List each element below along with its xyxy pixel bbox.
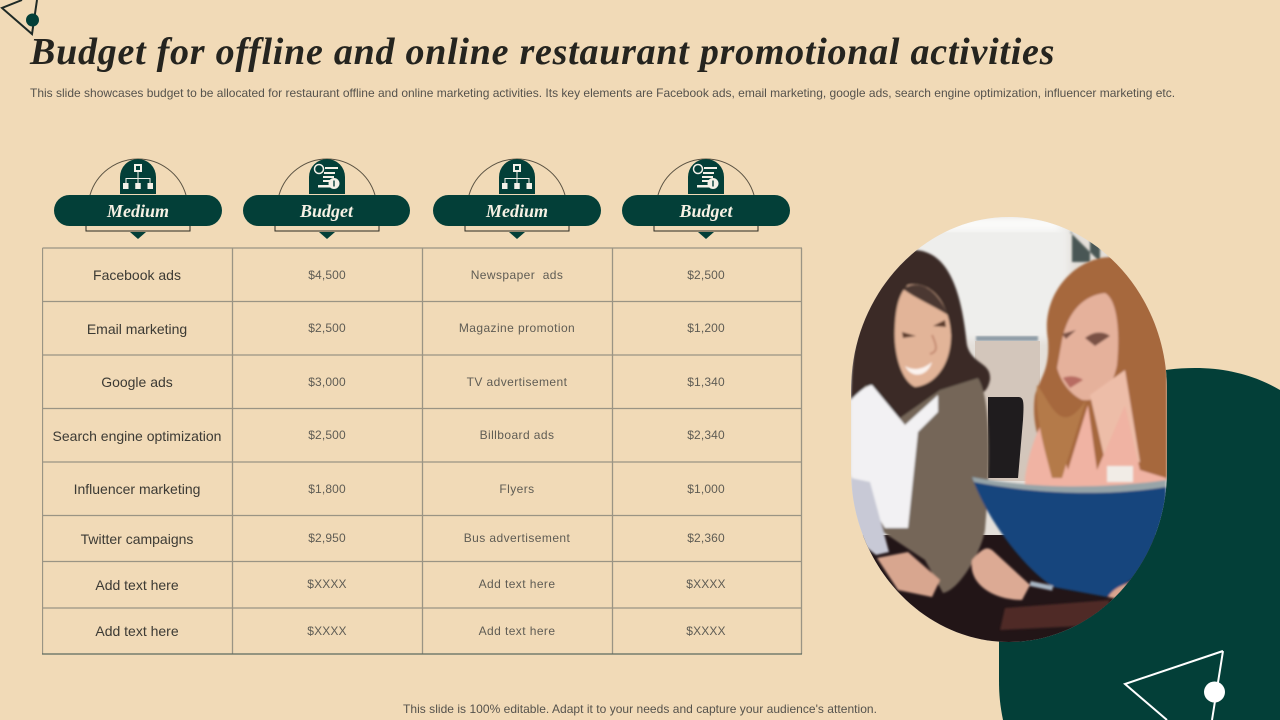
header decorations and icons <box>86 158 758 239</box>
table: TV advertisement <box>467 375 567 389</box>
table: $1,800 <box>308 482 346 496</box>
subtitle: This slide showcases budget to be allocated for restaurant offline and online marketing activities. Its key elements are Facebook ads, email marketing, google ads, search engine optimization, influencer marketing etc. <box>30 86 1175 100</box>
header pill: Budget <box>622 195 790 226</box>
table: Newspaper ads <box>471 268 563 282</box>
table: $1,340 <box>687 375 725 389</box>
table: $2,340 <box>687 428 725 442</box>
header ornament 3 <box>465 159 569 239</box>
decoration: top-left triangle <box>0 0 39 36</box>
right woman <box>1034 257 1167 480</box>
hands and table <box>972 548 1030 600</box>
table: $2,500 <box>308 321 346 335</box>
table: $2,500 <box>308 428 346 442</box>
table: Magazine promotion <box>459 321 575 335</box>
title: Budget for offline and online restaurant promotional activities <box>30 31 1055 73</box>
table: Twitter campaigns <box>81 531 193 547</box>
table: Flyers <box>499 482 535 496</box>
table: Add text here <box>95 623 179 639</box>
table: $1,000 <box>687 482 725 496</box>
header pill: Budget <box>243 195 410 226</box>
decoration: bottom-right triangle <box>1123 650 1225 720</box>
header ornament 4 <box>654 159 758 239</box>
table: $XXXX <box>307 577 347 591</box>
header pill: Medium <box>433 195 601 226</box>
table <box>42 247 802 655</box>
table: Influencer marketing <box>74 481 200 497</box>
table: Add text here <box>95 577 179 593</box>
header ornament 1 <box>86 159 190 239</box>
table: Add text here <box>479 577 555 591</box>
table: Billboard ads <box>480 428 554 442</box>
table: Google ads <box>101 374 173 390</box>
table: Search engine optimization <box>53 428 221 444</box>
table: $XXXX <box>686 577 726 591</box>
header pill: Medium: Medium <box>107 201 169 221</box>
table: Bus advertisement <box>464 531 570 545</box>
table: $1,200 <box>687 321 725 335</box>
green background shape <box>999 368 1280 720</box>
table: $XXXX <box>686 624 726 638</box>
table: $2,500 <box>687 268 725 282</box>
header pill: Budget: Budget <box>679 201 732 221</box>
table: $2,950 <box>308 531 346 545</box>
table: $4,500 <box>308 268 346 282</box>
footer note: This slide is 100% editable. Adapt it to your needs and capture your audience's attention. <box>403 702 877 716</box>
header pill: Budget: Budget <box>300 201 353 221</box>
table: $XXXX <box>307 624 347 638</box>
table: $3,000 <box>308 375 346 389</box>
header ornament 2 <box>275 159 379 239</box>
header pill: Medium <box>54 195 222 226</box>
left woman <box>851 248 992 420</box>
table: Email marketing <box>87 321 187 337</box>
table: Add text here <box>479 624 555 638</box>
blue folder <box>972 477 1166 597</box>
header pill: Medium: Medium <box>486 201 548 221</box>
table: $2,360 <box>687 531 725 545</box>
table: Facebook ads <box>93 267 181 283</box>
photo: two women reviewing a blue folder <box>851 217 1167 642</box>
